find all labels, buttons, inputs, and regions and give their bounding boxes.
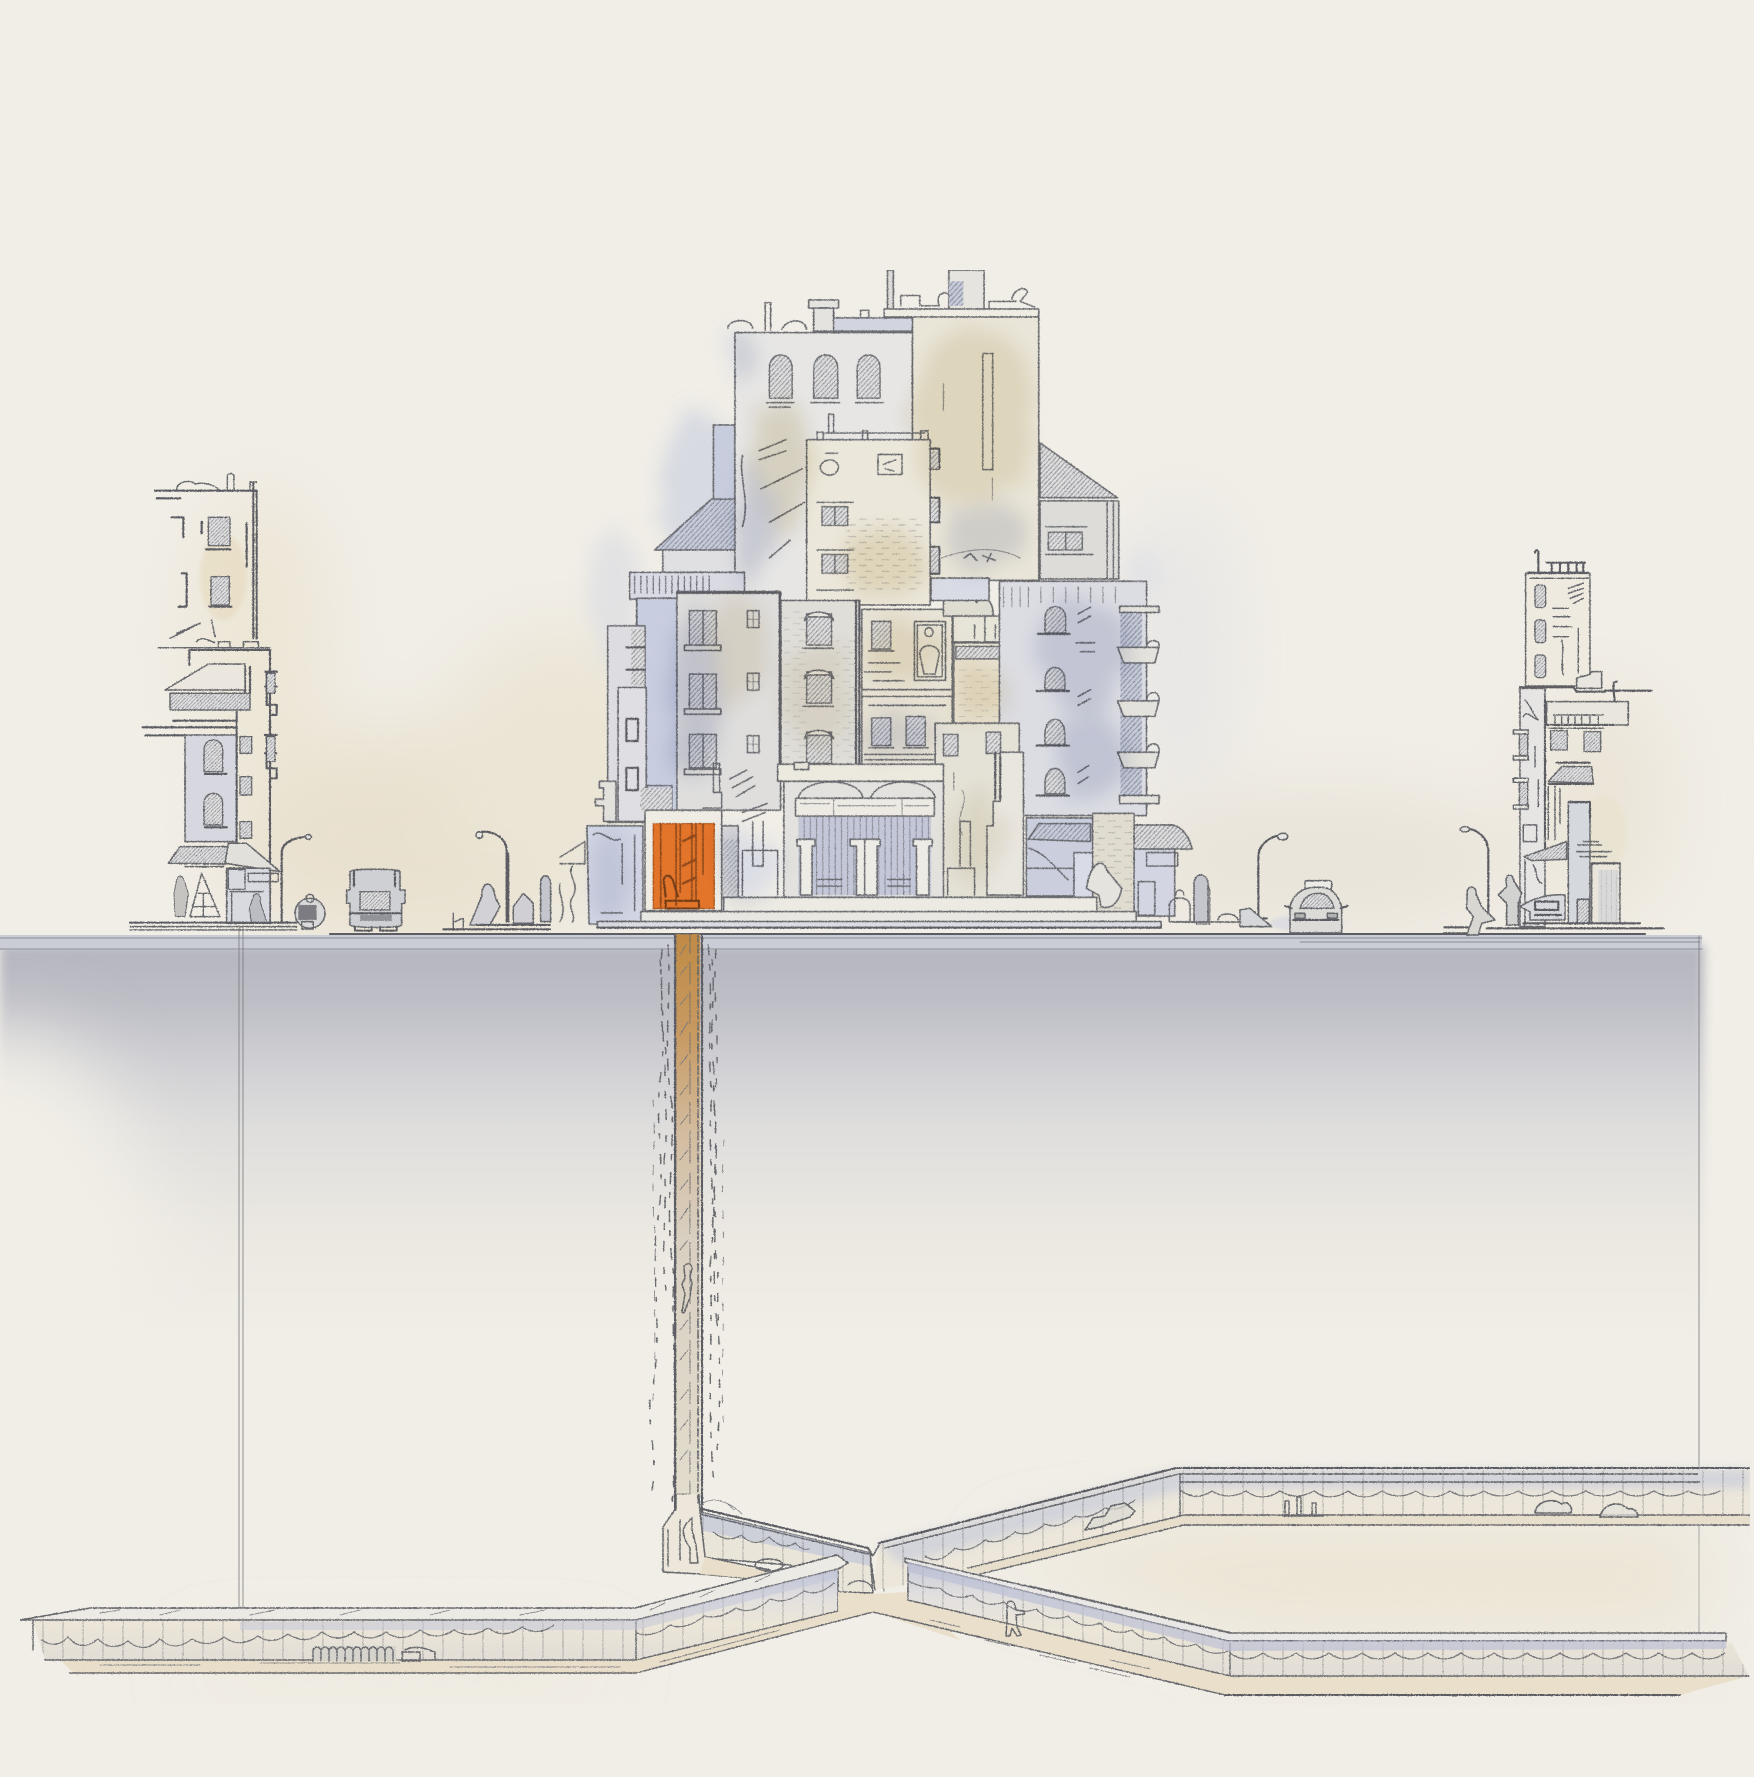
right awning (1134, 825, 1192, 849)
tall windows (689, 611, 716, 646)
arched window sills (205, 774, 227, 827)
roof rail and pipe (1528, 550, 1588, 573)
left main block (677, 591, 781, 810)
right tall tower (912, 317, 1039, 580)
corridor B garlands (42, 1625, 554, 1648)
seated figure (249, 894, 267, 923)
corridor B floor lines (70, 1612, 873, 1673)
orange door frame (645, 810, 722, 911)
corridor C corner notch (870, 1545, 879, 1590)
sills (206, 549, 232, 607)
water tank block (953, 616, 1019, 642)
corridor A hatch band (700, 1512, 870, 1566)
upper window (208, 517, 230, 546)
ground lines right (1487, 923, 1663, 928)
body of lower tower (185, 735, 237, 842)
right pitched roof (1040, 443, 1118, 498)
second window (211, 577, 229, 605)
floor bands (143, 712, 237, 843)
mid block lower (862, 690, 952, 766)
corridor C floor edges (968, 1515, 1750, 1568)
lower right shop (1592, 863, 1620, 923)
pitched roof (165, 664, 245, 690)
pipes (265, 672, 277, 778)
small square windows (747, 611, 759, 628)
entrance arches (798, 782, 935, 797)
stepped pillars (987, 752, 1023, 895)
awning hatched (1548, 767, 1593, 783)
corridor C rubble (1085, 1497, 1638, 1530)
mid block top (862, 609, 952, 690)
awning right (225, 843, 280, 872)
standing figure (1498, 875, 1522, 925)
rubble pile (190, 873, 220, 917)
corridor D garlands (908, 1581, 1228, 1653)
tower hatch marks (742, 440, 805, 558)
upper right windows (1551, 731, 1601, 752)
corridor D wall bottom (908, 1600, 1749, 1676)
sandbags and tank (943, 596, 993, 616)
roof cap (884, 309, 1039, 317)
left wall (1520, 688, 1545, 927)
roof pipe (887, 270, 893, 309)
right building (1240, 550, 1663, 935)
lamp post left (282, 837, 310, 922)
sidewalk figure right of building (1172, 875, 1240, 922)
coil on corridor A floor (755, 1559, 783, 1571)
far left narrow block (608, 626, 645, 822)
portrait poster (914, 621, 945, 680)
rubble ledge (158, 620, 270, 648)
right upper annex (1040, 501, 1119, 579)
right block arched windows (1045, 607, 1066, 633)
corridor A wall (700, 1512, 873, 1593)
seated figure (1467, 887, 1495, 935)
entrance sign band (795, 798, 934, 816)
awning left (168, 847, 228, 864)
left tall tower (735, 333, 912, 600)
watercolor washes behind buildings (190, 490, 1670, 950)
orange door (653, 824, 714, 908)
right block sills (1037, 634, 1070, 796)
side fire escape (930, 449, 939, 574)
mid ledge and arm (1520, 682, 1652, 703)
corridor C garlands (925, 1500, 1135, 1560)
bench (1444, 927, 1470, 933)
main building group (559, 270, 1210, 928)
window ledges (684, 645, 721, 650)
ground surface band (0, 935, 1702, 950)
roof clutter (177, 473, 257, 490)
figure climbing shaft (682, 1264, 692, 1313)
mid-left block (781, 600, 860, 766)
stacked barrier (313, 1646, 435, 1661)
lamp post left (1258, 835, 1285, 917)
seated hooded figure (1086, 863, 1122, 907)
corridor A garland (713, 1532, 809, 1549)
corridor A floor (700, 1557, 790, 1590)
corridor C wall (873, 1470, 1750, 1590)
tower windows (769, 355, 792, 398)
grey block (1568, 802, 1590, 923)
roof box (949, 270, 984, 309)
balconies (1519, 734, 1528, 756)
corridor D floor (873, 1600, 1749, 1695)
corridor B wall (33, 1570, 838, 1660)
figure with arm raised in corridor D (1006, 1601, 1025, 1636)
balconies (1118, 606, 1159, 804)
entrance doors (798, 817, 931, 895)
center tower windows (822, 507, 848, 525)
figure standing (174, 876, 188, 917)
far left inner pillar (618, 687, 646, 821)
shaft fractures (650, 945, 742, 1514)
corridor B wall bottom (45, 1611, 838, 1660)
upper tower lines (155, 483, 257, 638)
shaft walls (675, 934, 702, 1512)
baggage pile (513, 893, 533, 923)
blue side wall (637, 598, 678, 812)
left building wash (200, 533, 247, 620)
left building (130, 473, 551, 931)
lamp post middle (477, 832, 507, 922)
base steps (724, 897, 1097, 913)
corridor D top strip (905, 1558, 1726, 1641)
diagonal hatches (730, 770, 767, 821)
ground fade on left edge (0, 1030, 170, 1370)
ground gradient (0, 945, 1704, 1345)
side windows (240, 737, 252, 838)
center tower (807, 440, 930, 605)
corridor C top edges (879, 1468, 1749, 1543)
scooter (295, 894, 325, 929)
small hatched door (1577, 899, 1589, 923)
car (1285, 881, 1347, 933)
center tower ornaments (820, 453, 839, 475)
seated figure by lamp (470, 884, 500, 925)
center tower brick (846, 518, 925, 594)
shop sign (228, 869, 245, 889)
figure in chamber (683, 1518, 698, 1563)
upper box (1547, 702, 1628, 725)
roof clutter (901, 289, 1035, 308)
ground lines left (130, 922, 297, 924)
arched windows (204, 740, 223, 772)
left pitched roof (655, 499, 736, 550)
roof items on left tower (728, 303, 869, 330)
top entablature (778, 764, 943, 781)
center right mid block (935, 723, 1019, 897)
entrance columns (797, 839, 932, 895)
shaft (676, 934, 700, 1494)
door frame block at left (641, 786, 672, 810)
left pipe fixture (595, 781, 616, 821)
rope pile in junction (848, 1581, 872, 1588)
tower sills (766, 403, 883, 407)
rubble niche (1074, 853, 1104, 897)
corridor A top edge (698, 1508, 872, 1555)
left of entrance (722, 826, 738, 897)
pile beside lamp (1240, 908, 1272, 927)
lower awning (1524, 842, 1567, 861)
entrance lintel (784, 781, 943, 897)
wash behind main building (589, 411, 1161, 670)
ground cross-section (0, 925, 1704, 1640)
corridor C floor (965, 1515, 1750, 1574)
corridor B top strip (20, 1555, 848, 1620)
right shop (1134, 849, 1175, 916)
lamp post right (1462, 828, 1488, 920)
cat (453, 913, 463, 930)
wall base (1525, 860, 1542, 925)
balcony columns (1120, 607, 1142, 804)
low left back block (630, 572, 744, 599)
corridor B floor (60, 1611, 873, 1674)
figure in junction (880, 1561, 888, 1591)
watercolor washes on building (589, 326, 1128, 915)
shaft rungs (676, 934, 690, 1494)
left awning stall (559, 841, 585, 922)
right balcony block (999, 581, 1147, 816)
tunnels (20, 934, 1750, 1705)
lower left block (587, 826, 643, 924)
shaft chamber (663, 1480, 770, 1578)
brick column (1093, 813, 1134, 915)
shop front (227, 868, 270, 923)
truck (347, 869, 405, 931)
standing figure near wall (541, 876, 551, 922)
hatch marks (1577, 842, 1612, 857)
hatched eave (170, 693, 250, 710)
roof rocks (1577, 672, 1602, 688)
lower right dark shop (1026, 818, 1093, 896)
ornate windows (807, 614, 831, 645)
right upper tower (1526, 573, 1590, 686)
center tower roof pipes (817, 414, 928, 440)
tan wash beneath and between tunnels (200, 1530, 1700, 1705)
pot and figure right of building (1169, 890, 1190, 922)
right building wash (1270, 610, 1627, 932)
narrow stripes (1548, 787, 1560, 840)
corridor B strip shadow (240, 1569, 838, 1630)
middle block (189, 650, 270, 923)
left vertical boundary line (239, 925, 243, 1618)
corridor D wall (908, 1562, 1749, 1676)
chimney block (713, 425, 735, 501)
ground edge lines (330, 933, 1645, 935)
right vertical boundary line (1698, 936, 1700, 1640)
parked car side (1520, 895, 1565, 920)
tower windows (1535, 585, 1546, 608)
junction floor (838, 1592, 960, 1640)
